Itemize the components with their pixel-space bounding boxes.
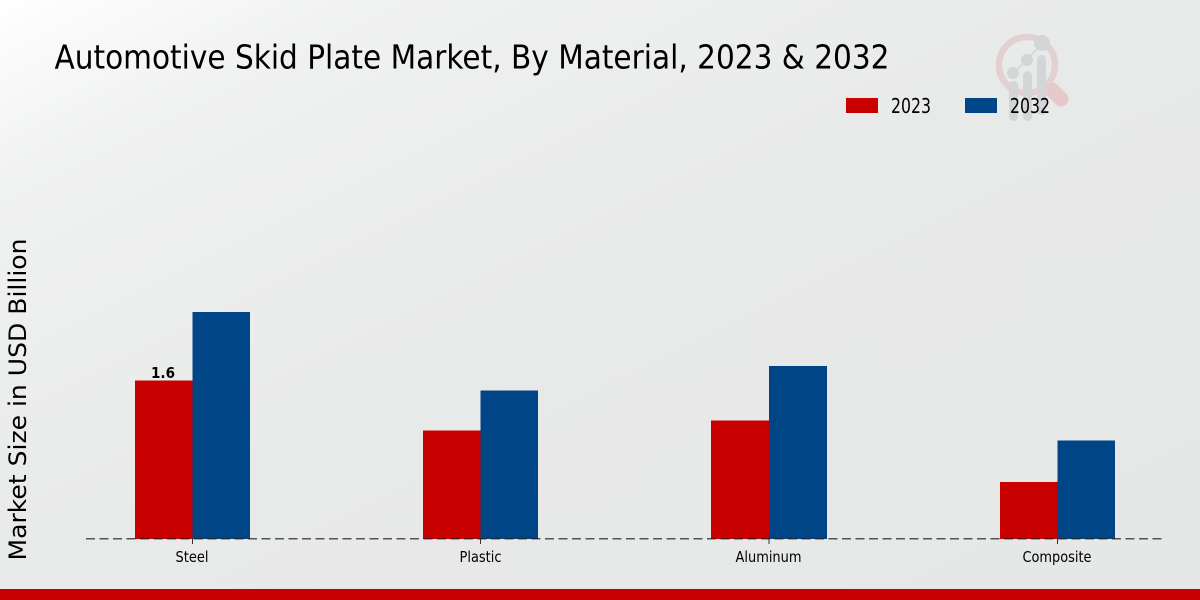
legend: 2023 <box>891 94 931 118</box>
bar chart <box>86 312 1164 566</box>
legend <box>846 94 1050 118</box>
bars: Composite <box>1000 440 1115 539</box>
x axis labels: Aluminum <box>736 548 802 566</box>
title: Automotive Skid Plate Market, By Material, 2023 & 2032 <box>54 38 890 76</box>
bars: Steel <box>135 312 250 539</box>
watermark logo <box>999 35 1061 121</box>
legend: 2032 <box>1010 94 1050 118</box>
x axis <box>86 539 1164 544</box>
bars: Aluminum <box>711 366 827 539</box>
bars: Plastic <box>423 390 538 539</box>
value label: 1.6: 1.6 <box>151 364 175 382</box>
x axis labels: Plastic <box>460 548 502 566</box>
footer bar <box>0 589 1200 600</box>
x axis labels <box>176 548 1092 566</box>
x axis labels: Steel <box>176 548 208 566</box>
y axis label: Market Size in USD Billion <box>4 238 32 560</box>
x axis labels: Composite <box>1022 548 1092 566</box>
